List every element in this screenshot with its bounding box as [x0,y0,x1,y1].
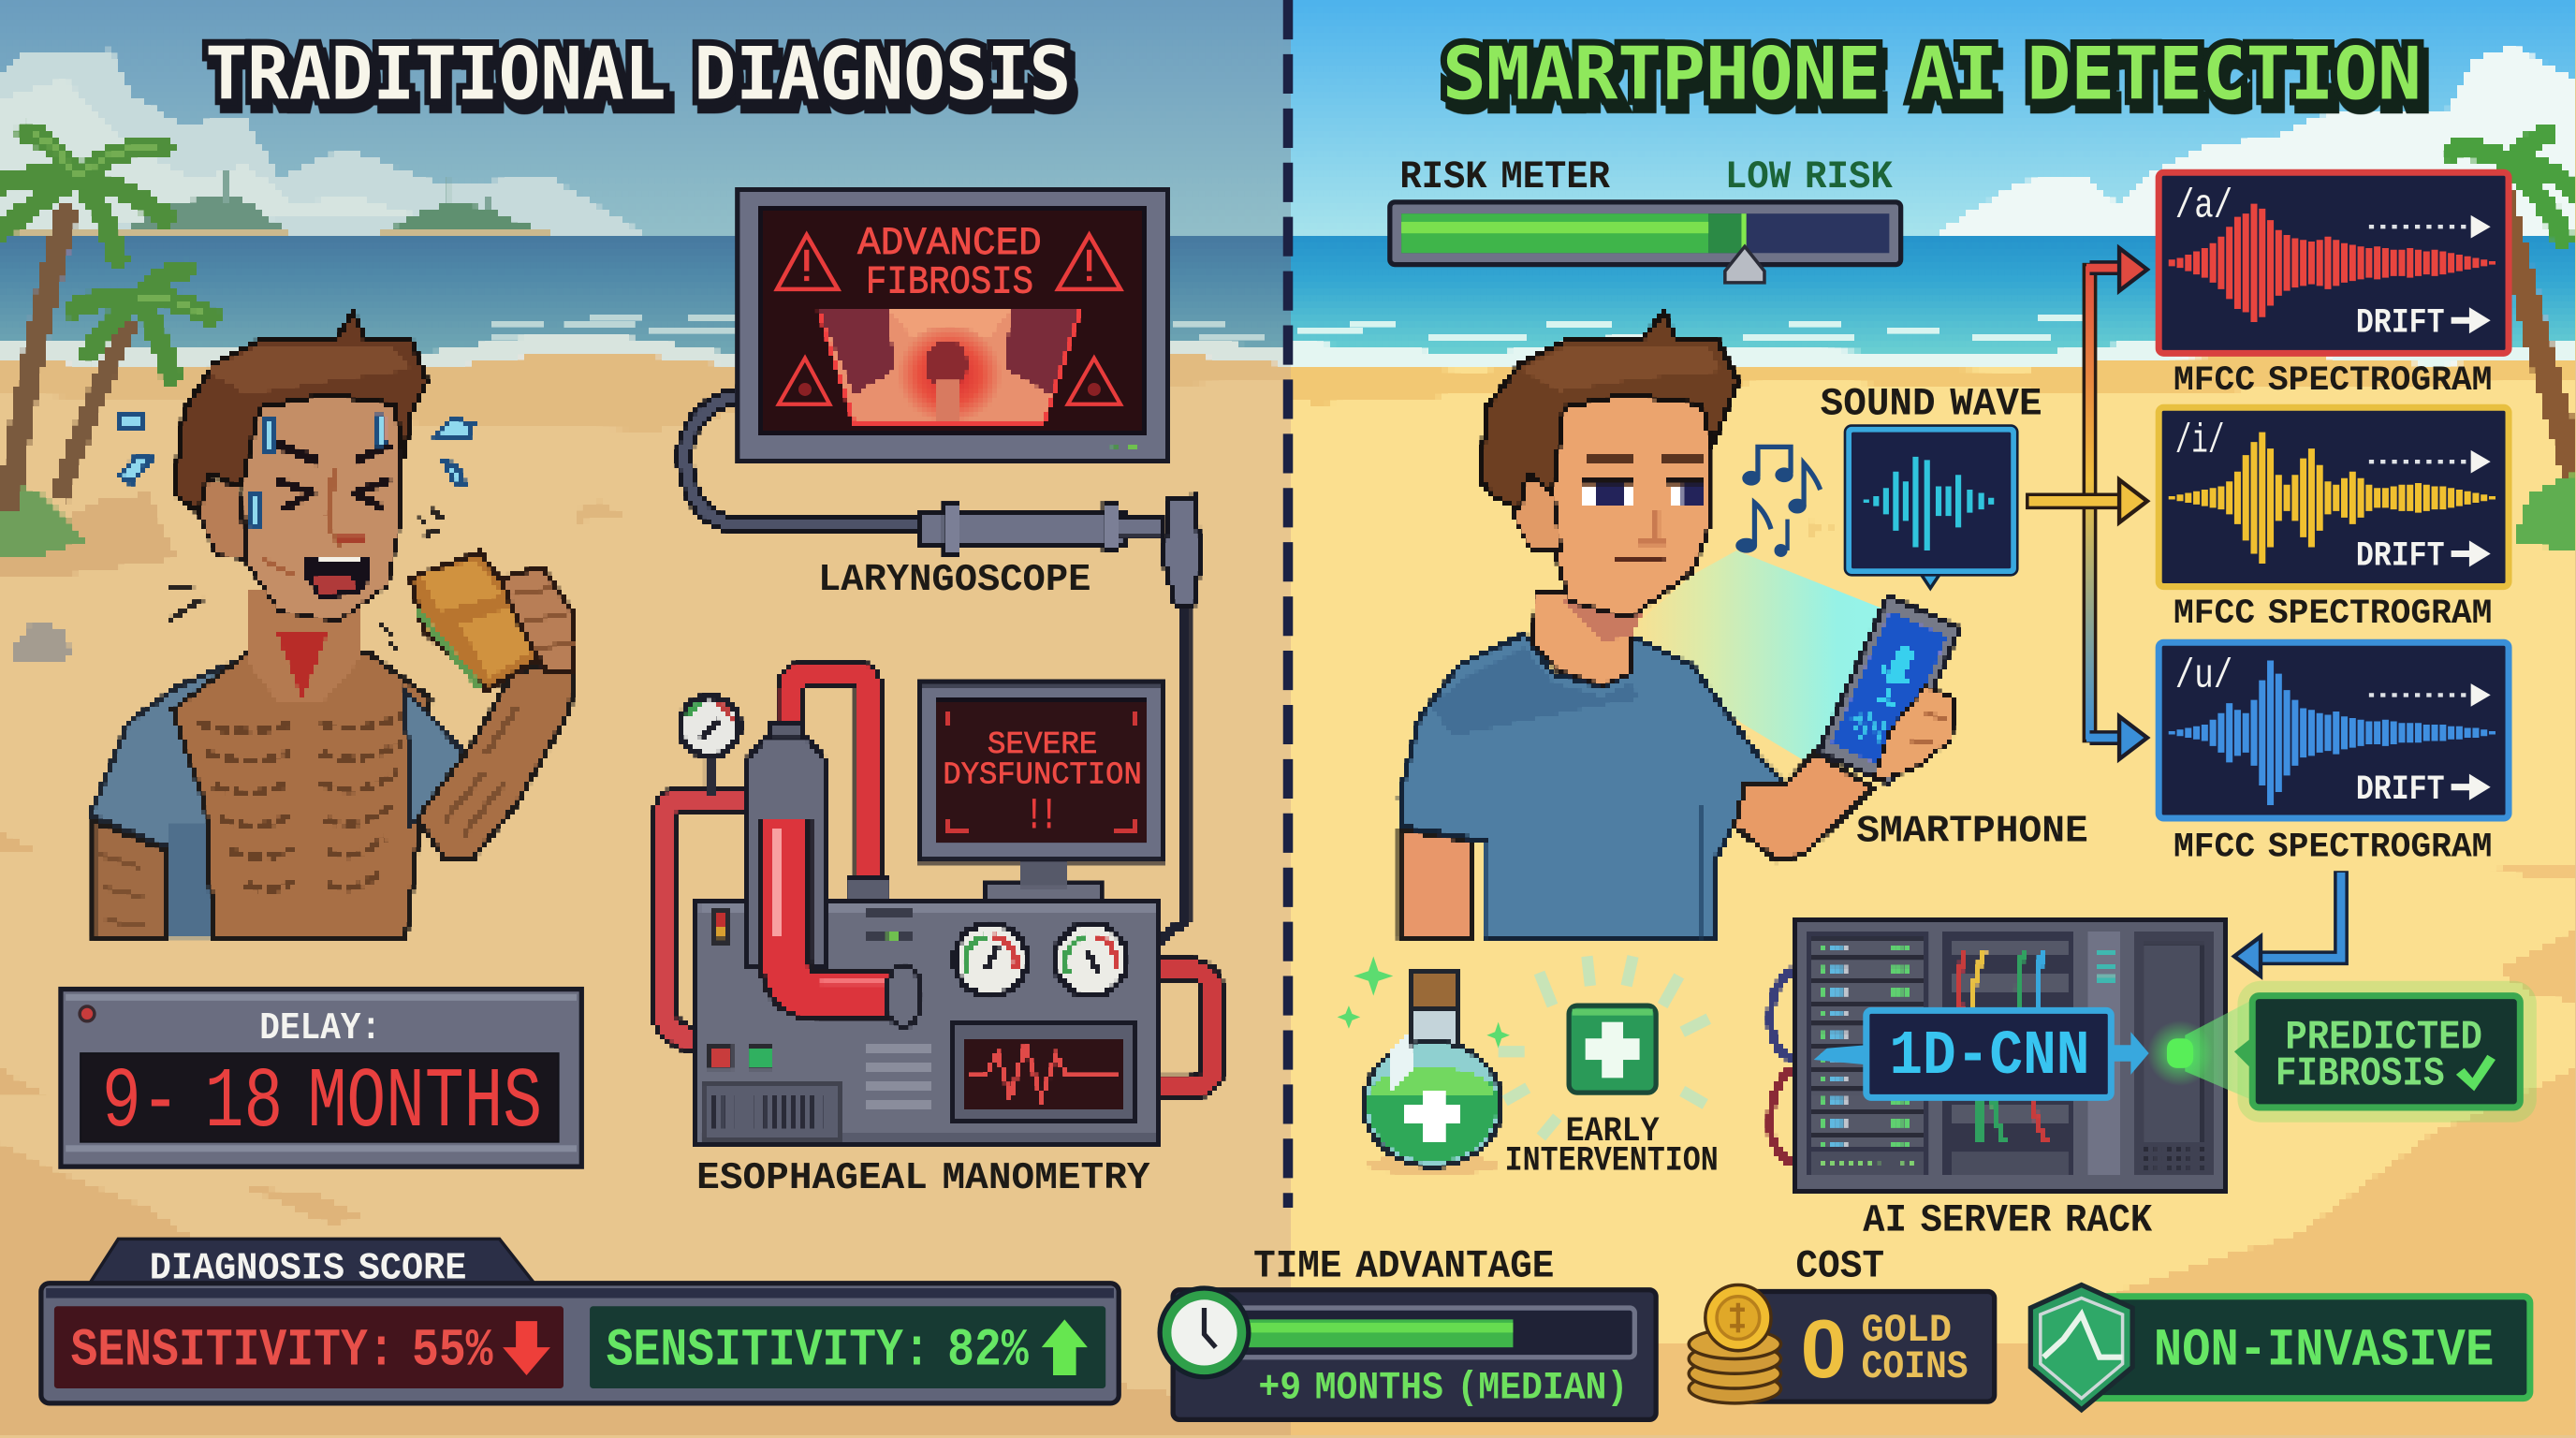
badge: non-invasive [2030,1284,2530,1410]
arrows: sound wave to spectrograms [2026,248,2147,759]
frame and waveform [2159,642,2509,818]
panel: time advantage [1160,1244,1656,1419]
panel: delay readout [61,990,581,1167]
icon: manometry machine [666,674,1212,1145]
figure [1399,312,1960,938]
text: delay: DELAY: [259,1007,381,1050]
cell background [590,1306,1105,1388]
value: 9-18 months: 9- 18 MONTHS [102,1055,542,1152]
icon: down arrow [503,1321,550,1375]
panel: spectrogram /u/ [2159,642,2509,867]
text: drift: DRIFT [2356,537,2445,577]
text: drift: DRIFT [2356,304,2445,344]
label: spectrogram: MFCC SPECTROGRAM [2174,594,2492,634]
icon: laryngoscope [684,394,1201,940]
icon: warning triangle top left [777,235,838,289]
label: spectrogram: MFCC SPECTROGRAM [2174,828,2492,867]
text: gold: GOLD [1862,1308,1952,1353]
icon: shield [2030,1284,2132,1410]
panel frame and progress bar [1173,1290,1656,1419]
panel: advanced fibrosis monitor [739,191,1168,460]
arrow: spectrogram to server [2234,871,2341,976]
beam of sound to phone [1627,550,1889,772]
callout box [2234,981,2537,1123]
label: sound wave: SOUND WAVE [1821,381,2042,426]
heading: fibrosis: FIBROSIS [866,259,1033,304]
text: drift: DRIFT [2356,770,2445,810]
title: traditional diagnosis: TRADITIONAL DIAGNOSIS [205,32,1071,116]
character: patient coughing with fibrosis [91,312,575,938]
panel: cost [1689,1244,1995,1403]
frame and waveform [2159,172,2509,353]
icon: clock [1160,1288,1249,1377]
text: early: EARLY [1566,1112,1660,1152]
panel: diagnosis score [41,1239,1119,1403]
value: plus nine months: +9 MONTHS (MEDIAN) [1258,1366,1628,1411]
callout: predicted fibrosis [2234,981,2537,1123]
label: smartphone: SMARTPHONE [1856,811,2088,854]
panel: laryngoscope cable and device [684,394,1201,940]
panel: early intervention [1338,956,1719,1181]
panel: spectrogram /i/ [2159,407,2509,634]
text: 1D-CNN: 1D-CNN [1889,1021,2089,1093]
label: low risk: LOW RISK [1725,154,1894,199]
title: smartphone AI detection: SMARTPHONE AI DETECTION [1442,32,2422,116]
text: non-invasive: NON-INVASIVE [2154,1321,2494,1381]
label: AI server rack: AI SERVER RACK [1863,1198,2153,1243]
label: risk meter: RISK METER [1399,154,1611,199]
label: cost: COST [1795,1244,1884,1289]
box: 1D-CNN [1814,1010,2149,1097]
text: coins: COINS [1862,1344,1969,1389]
text: vowel a: /a/ [2175,183,2232,230]
panel: risk meter [1390,154,1901,283]
icon: music notes [1736,447,1821,557]
text: predicted: PREDICTED [2285,1015,2482,1062]
icon: server rack [1771,920,2224,1190]
icon: monitor with throat scan [739,191,1168,460]
frame and waveform [2159,407,2509,587]
panel: AI server rack [1771,920,2254,1243]
icon: warning triangle bottom right [1068,359,1120,404]
text: dysfunction: DYSFUNCTION [943,757,1142,793]
icon: warning triangle top right [1058,235,1120,289]
character: healthy user speaking into a smartphone [1399,312,1960,938]
panel: spectrogram /a/ [2159,172,2509,401]
icon: sound wave speech bubble [1845,426,2017,588]
icon: up arrow [1042,1319,1088,1375]
cell background [54,1306,564,1388]
text: severe: SEVERE [988,727,1097,763]
panel: esophageal manometry machine [666,674,1212,1200]
text: fibrosis: FIBROSIS [2276,1050,2445,1097]
label: laryngoscope: LARYNGOSCOPE [818,559,1090,602]
icon: green status light [2147,999,2254,1101]
icon: green potion [1364,971,1501,1175]
heading: advanced: ADVANCED [857,221,1042,266]
text: vowel u: /u/ [2175,653,2232,700]
panel frame [61,990,581,1167]
divider: dashed centre line [1285,0,1291,1208]
text: vowel i: /i/ [2175,418,2224,465]
tab [89,1239,535,1284]
label: spectrogram: MFCC SPECTROGRAM [2174,361,2492,401]
score frame [41,1284,1119,1403]
label: time advantage: TIME ADVANTAGE [1253,1244,1554,1289]
gauge bar [1390,202,1901,283]
label: esophageal manometry: ESOPHAGEAL MANOMETRY [696,1157,1150,1200]
cell: traditional sensitivity [54,1306,564,1388]
panel frame [1725,1292,1995,1401]
badge frame [2086,1297,2530,1399]
panel: sound wave [1821,381,2042,588]
icon: warning triangle bottom left [779,359,829,404]
value: zero: 0 [1801,1303,1847,1395]
icon: sparkles [1338,956,1510,1049]
value: sensitivity 55%: SENSITIVITY: 55% [70,1321,493,1381]
value: sensitivity 82%: SENSITIVITY: 82% [607,1321,1029,1381]
cell: AI sensitivity [590,1306,1105,1388]
text: exclamation marks: !! [1027,793,1057,843]
icon: gold coin stack [1689,1284,1781,1403]
tab label: DIAGNOSIS SCORE [150,1247,466,1290]
text: intervention: INTERVENTION [1505,1142,1719,1181]
background: bright AI detection beach scene [1288,0,2576,1438]
background: muted traditional beach scene [0,0,1288,1438]
icon: medical cross with rays [1499,956,1708,1137]
